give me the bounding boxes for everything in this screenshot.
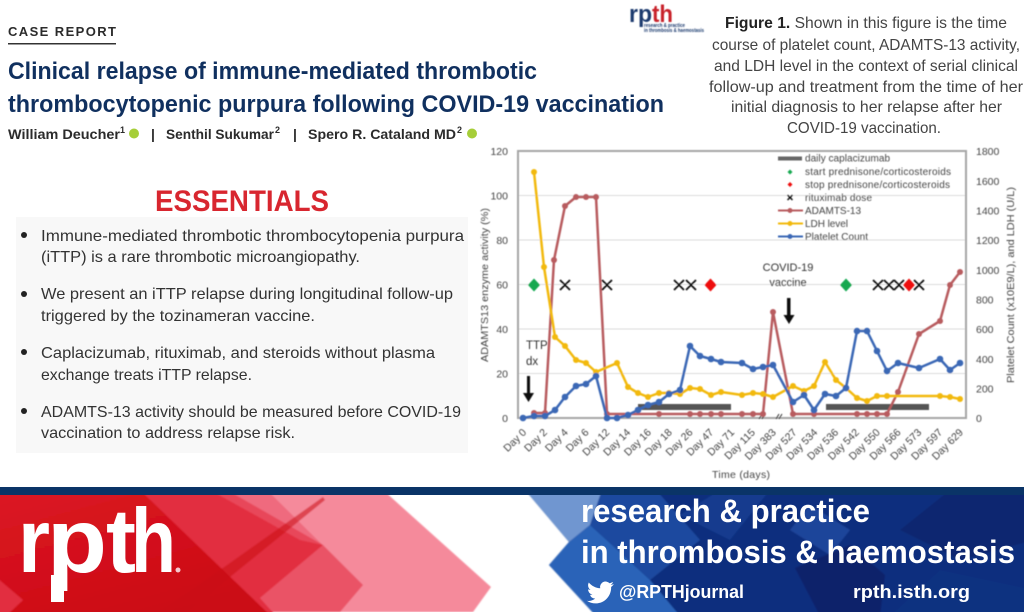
legend: Platelet Count	[805, 232, 868, 243]
legend: ADAMTS-13	[805, 206, 861, 217]
x axis day labels: Day 550	[847, 427, 883, 463]
legend: LDH level	[805, 219, 848, 230]
right axis labels: 200	[976, 384, 994, 396]
authors: William Deucher	[8, 126, 121, 142]
bullet 2: We present an iTTP relapse during longitudinal follow-up	[41, 286, 453, 303]
red geometric background	[0, 490, 491, 612]
figure caption: initial diagnosis to her relapse after her	[731, 99, 1003, 116]
icon: twitter bird	[587, 582, 614, 603]
article label: case report: CASE REPORT	[8, 24, 116, 39]
large rpth logo: p	[47, 491, 107, 592]
authors: 1	[120, 125, 125, 135]
authors: 2	[275, 125, 280, 135]
figure caption: and LDH level in the context of serial clinical	[714, 58, 1018, 75]
right axis labels: 1800	[976, 146, 1000, 158]
x axis day labels: Day 4	[543, 427, 571, 455]
figure caption: Figure 1. Shown in this figure is the time	[725, 15, 1007, 32]
left axis labels: 40	[496, 324, 508, 336]
journal name: research & practice	[581, 493, 870, 529]
left axis title: ADAMTS13 enzyme activity (%)	[479, 208, 491, 362]
small rpth logo: th	[652, 1, 673, 28]
small rpth logo: research & practice	[644, 23, 685, 29]
authors: |	[151, 126, 155, 142]
line chart	[479, 146, 1017, 481]
authors: Senthil Sukumar	[166, 126, 275, 142]
x axis day labels: Day 542	[826, 427, 862, 463]
x axis day labels: Day 26	[664, 427, 696, 459]
right axis labels: 1000	[976, 265, 1000, 277]
annotation: TTP dx	[523, 340, 548, 402]
x axis day labels	[501, 427, 966, 463]
left axis labels: 60	[496, 280, 508, 292]
axis break marks	[759, 414, 782, 419]
plot frame	[518, 151, 966, 418]
left axis labels: 20	[496, 368, 508, 380]
left axis labels: 100	[490, 190, 508, 202]
left axis labels: 0	[502, 413, 508, 425]
right axis title: Platelet Count (x10E9/L), and LDH (U/L)	[1005, 187, 1017, 383]
x axis day labels: Day 115	[722, 427, 758, 462]
x axis day labels: Day 597	[909, 427, 945, 463]
large rpth logo: r	[18, 491, 50, 592]
legend: start prednisone/corticosteroids	[805, 167, 951, 178]
journal name: in thrombosis & haemostasis	[581, 534, 1015, 570]
bullet 4	[21, 404, 461, 442]
large rpth logo: h	[131, 491, 176, 592]
series: LDH level	[534, 172, 960, 401]
left axis labels: 120	[490, 146, 508, 158]
bullet 1: Immune-mediated thrombotic thrombocytopenia purpura	[41, 228, 464, 245]
title: Clinical relapse of immune-mediated thrombotic	[8, 58, 537, 85]
panel: essentials list	[16, 217, 468, 453]
right axis labels: 400	[976, 354, 994, 366]
right axis labels	[976, 146, 1000, 425]
small rpth logo: rp	[629, 1, 652, 28]
legend: stop prednisone/corticosteroids	[805, 180, 950, 191]
x axis day labels: Day 47	[684, 427, 716, 459]
bullet 3: exchange treats iTTP relapse.	[41, 367, 252, 384]
annotation: COVID-19 vaccine: COVID-19	[763, 262, 813, 274]
x axis day labels: Day 566	[867, 427, 904, 463]
annotation: COVID-19 vaccine: vaccine	[769, 277, 807, 289]
legend: rituximab dose	[805, 193, 872, 204]
journal name	[581, 493, 1015, 570]
bullet 2	[21, 286, 453, 325]
authors: 2	[457, 125, 462, 135]
website: rpth.isth.org	[853, 582, 970, 602]
navy top bar	[0, 487, 1024, 495]
bullet 4: ADAMTS-13 activity should be measured before COVID-19	[41, 404, 461, 421]
blue geometric background	[525, 490, 1024, 612]
authors: |	[293, 126, 297, 142]
figure caption: follow-up and treatment from the time of her	[709, 79, 1024, 96]
legend	[778, 154, 951, 243]
x axis day labels: Day 14	[601, 427, 633, 459]
treatment markers row	[528, 278, 924, 292]
right axis labels: 600	[976, 324, 994, 336]
bullet 2: triggered by the tozinameran vaccine.	[41, 308, 315, 325]
right axis labels: 1200	[976, 235, 1000, 247]
figure caption	[709, 15, 1024, 137]
left axis labels	[490, 146, 508, 425]
bullet 3: Caplacizumab, rituximab, and steroids without plasma	[41, 345, 435, 362]
legend: daily caplacizumab	[805, 154, 890, 164]
small rpth logo	[629, 1, 704, 34]
caplacizumab bars	[638, 404, 929, 410]
authors: Spero R. Cataland MD	[308, 126, 456, 142]
x axis day labels: Day 0	[501, 427, 529, 455]
series: ADAMTS-13	[534, 197, 960, 414]
title	[8, 58, 664, 118]
figure caption: course of platelet count, ADAMTS-13 activity,	[712, 37, 1020, 54]
x axis day labels: Day 383	[743, 427, 779, 463]
x axis day labels: Day 2	[522, 427, 550, 455]
bullet 4: vaccination to address relapse risk.	[41, 425, 295, 442]
left axis labels: 80	[496, 235, 508, 247]
footer banner	[0, 487, 1024, 612]
small rpth logo: in thrombosis & haemostasis	[644, 28, 704, 34]
x axis day labels: Day 527	[763, 427, 800, 463]
annotation: TTP dx: TTP	[526, 340, 548, 352]
right axis labels: 0	[976, 413, 982, 425]
x axis day labels: Day 629	[930, 427, 966, 463]
annotation: COVID-19 vaccine	[763, 262, 813, 324]
right axis labels: 1600	[976, 176, 1000, 188]
x axis day labels: Day 536	[805, 427, 841, 463]
x axis day labels: Day 71	[705, 427, 737, 459]
x axis day labels: Day 6	[564, 427, 592, 455]
x axis day labels: Day 16	[622, 427, 654, 459]
x axis day labels: Day 573	[888, 427, 924, 463]
essentials heading: ESSENTIALS	[155, 185, 329, 218]
large rpth logo: t	[106, 491, 136, 592]
x axis day labels: Day 534	[784, 427, 820, 463]
bullet 3	[21, 345, 435, 384]
bullet 1	[21, 228, 464, 266]
x axis day labels: Day 12	[580, 427, 612, 459]
title: thrombocytopenic purpura following COVID-19 vaccination	[8, 91, 664, 118]
right axis labels: 1400	[976, 206, 1000, 218]
figure caption: COVID-19 vaccination.	[787, 120, 941, 137]
bullet 1: (iTTP) is a rare thrombotic microangiopathy.	[41, 249, 360, 266]
large rpth logo	[18, 491, 180, 602]
x axis day labels: Day 18	[643, 427, 675, 459]
authors	[8, 125, 477, 142]
twitter handle: @RPTHjournal	[619, 582, 744, 602]
right axis labels: 800	[976, 294, 994, 306]
annotation: TTP dx: dx	[526, 356, 538, 368]
series: platelet count	[523, 331, 960, 418]
x axis title: Time (days)	[712, 469, 770, 481]
